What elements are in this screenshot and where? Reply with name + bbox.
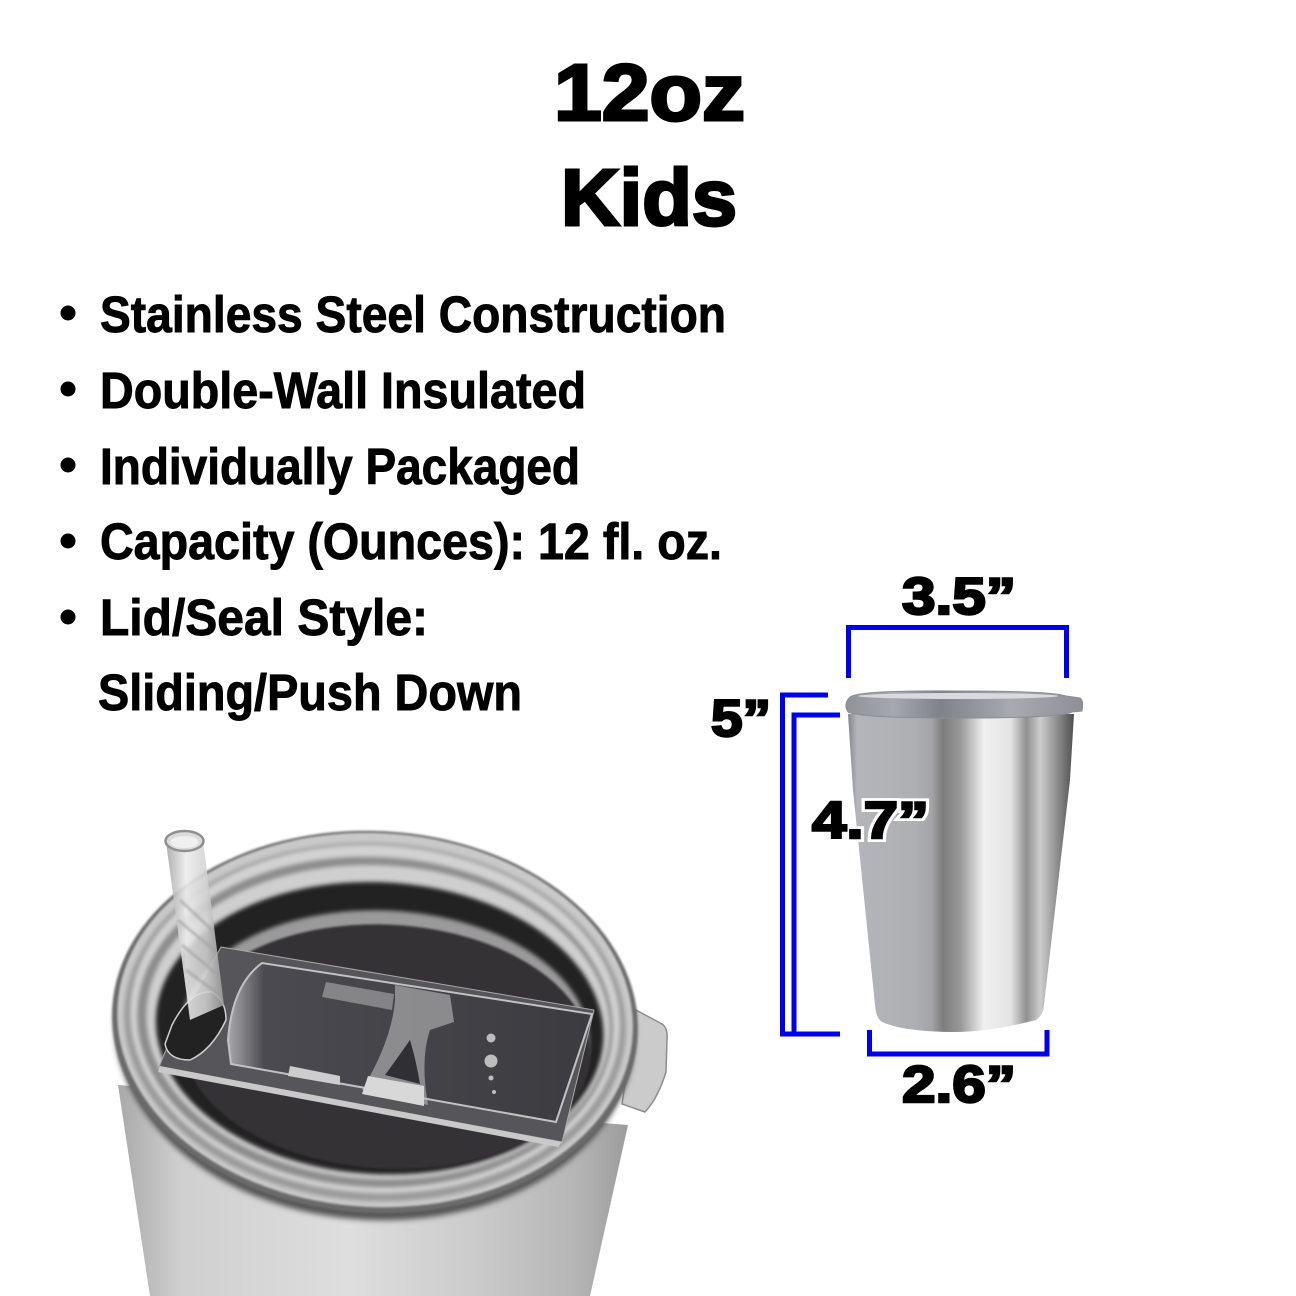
tumbler body: [118, 1085, 628, 1296]
lower lid strip: [158, 1066, 562, 1147]
bullet: packaged: Individually Packaged: [100, 438, 580, 495]
slider channel: [159, 947, 594, 1142]
label: body height: 4.7”: [812, 792, 929, 850]
bracket: overall height: [782, 695, 840, 1034]
label: overall height: 5”: [711, 690, 771, 748]
title: Kids: [561, 153, 737, 242]
bullet: capacity: Capacity (Ounces): 12 fl. oz.: [100, 513, 722, 570]
tumbler body: [848, 714, 1074, 1032]
tumbler lid: [846, 691, 1083, 718]
vent holes: [484, 1034, 498, 1094]
bullet: lid style: Lid/Seal Style:: [100, 589, 428, 646]
slider cap: [228, 963, 592, 1122]
straw: [166, 831, 224, 1020]
label: bottom width: 2.6”: [902, 1056, 1016, 1114]
photo: tumbler side view: [846, 691, 1083, 1032]
slider ribs: [288, 982, 454, 1106]
bullet: lid style: [60, 589, 522, 721]
feature list: [60, 286, 726, 721]
label: top width: 3.5”: [902, 568, 1016, 626]
title: [554, 48, 745, 242]
bracket: bottom width: [870, 1030, 1047, 1054]
title: 12oz: [554, 48, 745, 137]
lid rim: [102, 817, 648, 1233]
bullet: stainless steel: Stainless Steel Construction: [100, 286, 726, 343]
lid top highlight: [858, 693, 1058, 699]
bullet: lid style: Sliding/Push Down: [98, 664, 522, 721]
straw hole: [165, 992, 226, 1060]
bullet: double wall: Double-Wall Insulated: [100, 362, 586, 419]
photo: tumbler lid close-up: [102, 817, 667, 1296]
bracket: body height: [794, 715, 840, 1034]
sizing diagram: [711, 568, 1083, 1114]
label: body height: 4.7”: [812, 792, 929, 850]
tab on lid: [622, 1010, 667, 1112]
bracket: top width: [848, 628, 1066, 678]
